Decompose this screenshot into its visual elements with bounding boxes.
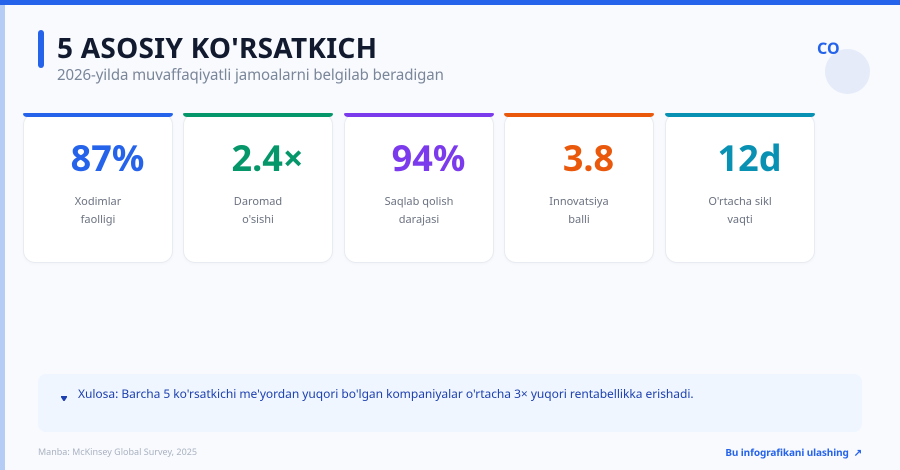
card: Daromad o'sishi: o'sishi (242, 212, 274, 227)
subtitle: 2026-yilda muvaffaqiyatli jamoalarni belgilab beradigan (57, 65, 444, 85)
card: O'rtacha sikl vaqti: vaqti (727, 212, 753, 227)
card: O'rtacha sikl vaqti: 12d (718, 133, 781, 182)
share link: Bu infografikani ulashing ↗ (725, 445, 862, 459)
top accent bar (0, 0, 900, 5)
logo text: CO (817, 37, 840, 59)
card: Saqlab qolish darajasi: 94% (392, 133, 465, 182)
card: Saqlab qolish darajasi (344, 113, 494, 263)
card: Xodimlar faolligi: Xodimlar (75, 194, 121, 209)
title accent (38, 30, 44, 68)
card: O'rtacha sikl vaqti: O'rtacha sikl (708, 194, 772, 209)
card: Xodimlar faolligi: 87% (71, 133, 144, 182)
left accent strip (0, 5, 5, 470)
card: Daromad o'sishi: Daromad (234, 194, 282, 209)
summary text: Xulosa: Barcha 5 ko'rsatkichi me'yordan yuqori bo'lgan kompaniyalar o'rtacha 3× yuqori rentabellikka erishadi. (78, 385, 694, 402)
card: Innovatsiya balli (504, 113, 654, 263)
card: Innovatsiya balli: balli (568, 212, 590, 227)
title: 5 ASOSIY KO'RSATKICH (57, 29, 377, 67)
card: Saqlab qolish darajasi: Saqlab qolish (385, 194, 453, 209)
card: Innovatsiya balli: Innovatsiya (549, 194, 609, 209)
decorative circle (825, 49, 870, 94)
card: Xodimlar faolligi (23, 113, 173, 263)
icon: marker (61, 396, 67, 401)
source: Manba: McKinsey Global Survey, 2025 (38, 445, 197, 458)
card: Daromad o'sishi (183, 113, 333, 263)
card: Saqlab qolish darajasi: darajasi (399, 212, 439, 227)
card: Daromad o'sishi: 2.4× (232, 133, 303, 182)
card: Xodimlar faolligi: faolligi (81, 212, 115, 227)
summary panel (38, 374, 862, 432)
card: O'rtacha sikl vaqti (665, 113, 815, 263)
card: Innovatsiya balli: 3.8 (563, 133, 614, 182)
